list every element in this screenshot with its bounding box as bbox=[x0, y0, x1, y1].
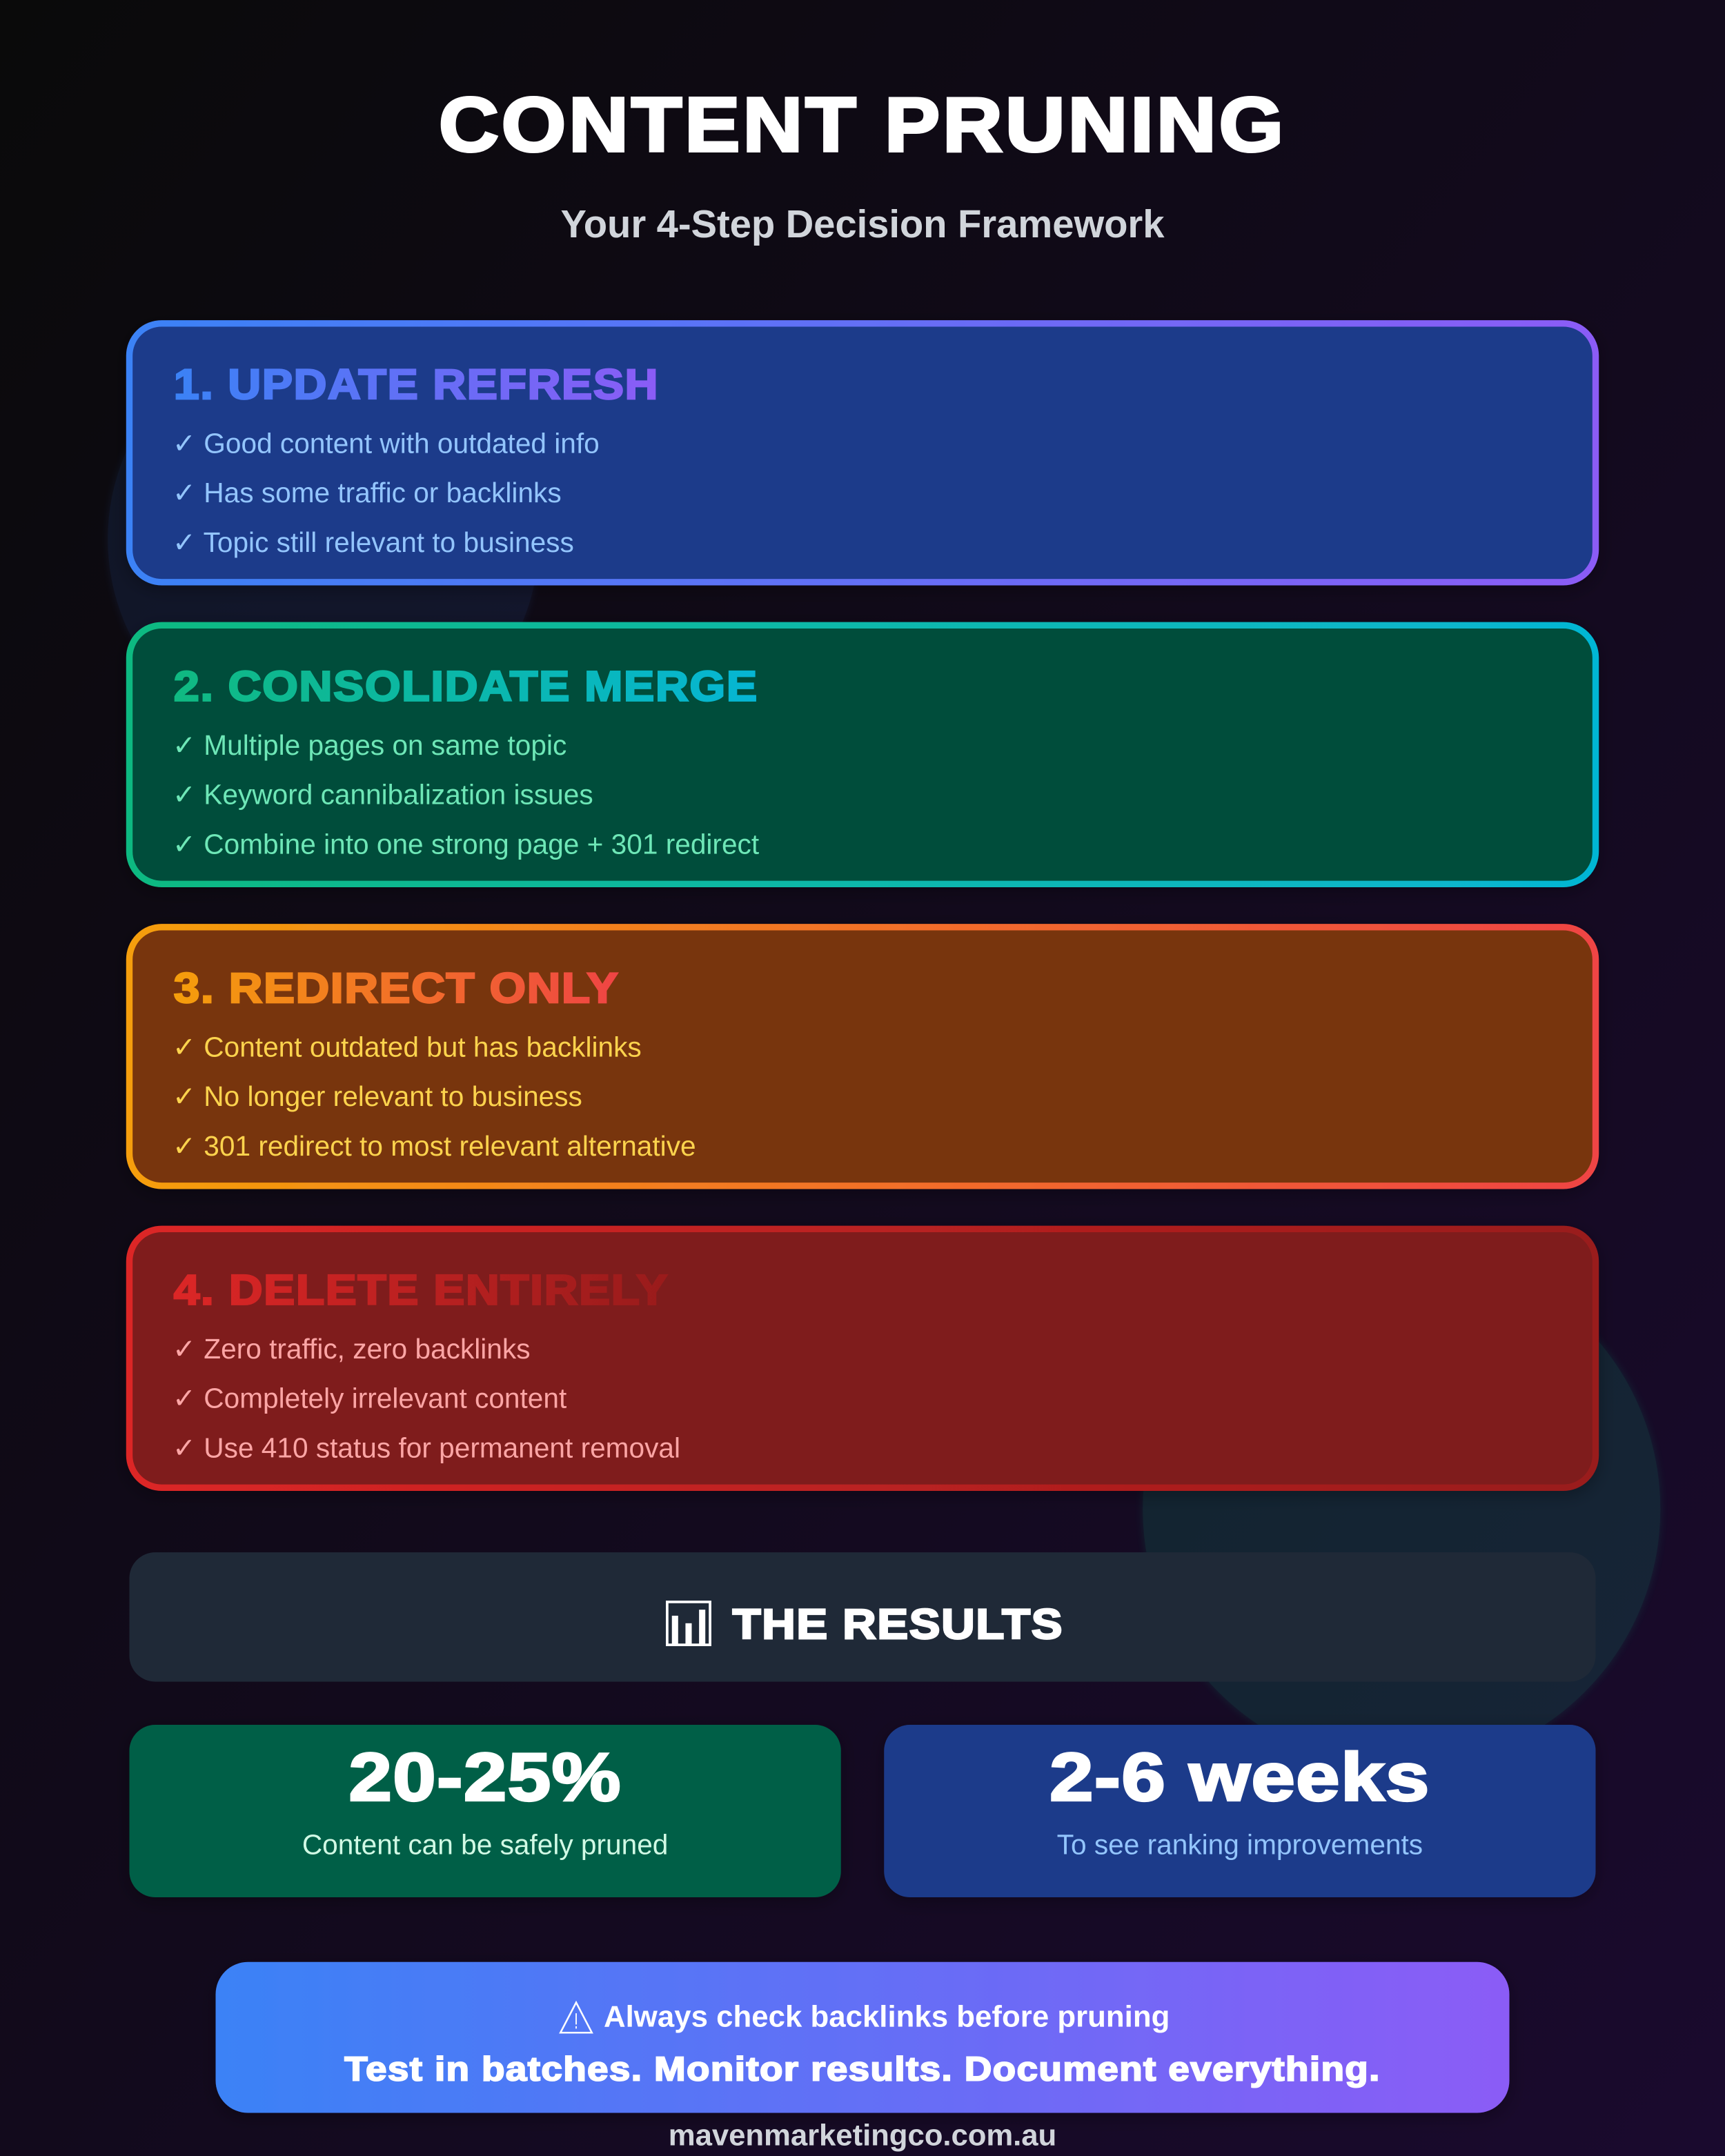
checklist: step 3: ✓ 301 redirect to most relevant alternative bbox=[172, 1130, 696, 1162]
checklist: step 4: ✓ Zero traffic, zero backlinks bbox=[172, 1333, 531, 1365]
checklist: step 2: ✓ Multiple pages on same topic bbox=[172, 729, 566, 761]
checklist: step 1: ✓ Has some traffic or backlinks bbox=[172, 477, 562, 508]
callout line 1: Always check backlinks before pruning bbox=[604, 1999, 1170, 2033]
heading: step 4: 4. DELETE ENTIRELY bbox=[174, 1267, 669, 1314]
checklist: step 4: ✓ Completely irrelevant content bbox=[172, 1383, 566, 1414]
stat label: Content can be safely pruned bbox=[302, 1828, 668, 1860]
checklist: step 1 bbox=[172, 427, 600, 558]
checklist: step 1: ✓ Good content with outdated info bbox=[172, 427, 600, 459]
checklist: step 2: ✓ Keyword cannibalization issues bbox=[172, 779, 593, 811]
panel: step 3 redirect only bbox=[130, 927, 1595, 1186]
heading: step 1: 1. UPDATE REFRESH bbox=[174, 361, 659, 408]
checklist: step 3 bbox=[172, 1031, 696, 1162]
checklist: step 3: ✓ Content outdated but has backlinks bbox=[172, 1031, 642, 1062]
callout line 2: Test in batches. Monitor results. Document everything. bbox=[344, 2050, 1381, 2088]
panel: results heading bbox=[130, 1552, 1595, 1682]
checklist: step 4: ✓ Use 410 status for permanent removal bbox=[172, 1432, 680, 1463]
checklist: step 2 bbox=[172, 729, 759, 860]
heading: step 3: 3. REDIRECT ONLY bbox=[174, 965, 619, 1011]
panel: step 1 update refresh bbox=[130, 324, 1595, 582]
panel: step 4 delete entirely bbox=[130, 1229, 1595, 1487]
icon: warning triangle bbox=[560, 2002, 592, 2033]
footer url: mavenmarketingco.com.au bbox=[669, 2118, 1056, 2152]
heading: step 2: 2. CONSOLIDATE MERGE bbox=[174, 663, 758, 710]
stat card: content pruned bbox=[130, 1725, 841, 1897]
heading: the results: THE RESULTS bbox=[733, 1601, 1063, 1648]
decorative blue circle bbox=[108, 324, 539, 755]
stat label: To see ranking improvements bbox=[1057, 1828, 1423, 1860]
title: CONTENT PRUNING bbox=[439, 82, 1286, 168]
callout: pruning advice bbox=[215, 1962, 1510, 2113]
subtitle: Your 4-Step Decision Framework bbox=[560, 202, 1165, 246]
checklist: step 3: ✓ No longer relevant to business bbox=[172, 1080, 582, 1112]
checklist: step 2: ✓ Combine into one strong page + 301 redirect bbox=[172, 829, 759, 860]
stat value: 2-6 weeks bbox=[1049, 1739, 1430, 1814]
checklist: step 4 bbox=[172, 1333, 680, 1463]
decorative green circle bbox=[1143, 1250, 1660, 1768]
stat card: ranking time bbox=[884, 1725, 1595, 1897]
panel: step 2 consolidate merge bbox=[130, 625, 1595, 884]
checklist: step 1: ✓ Topic still relevant to business bbox=[172, 526, 574, 558]
stat value: 20-25% bbox=[348, 1739, 622, 1814]
icon: bar chart bbox=[666, 1601, 711, 1646]
